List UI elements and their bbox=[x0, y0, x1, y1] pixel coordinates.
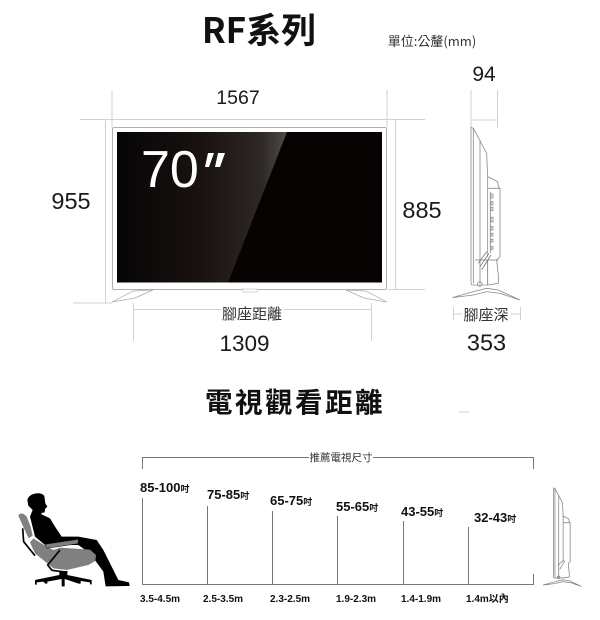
television screen bbox=[117, 132, 382, 282]
panel height value: 885 bbox=[402, 197, 442, 223]
inch mark bbox=[205, 153, 225, 167]
icon: seated person in lounge chair bbox=[18, 493, 130, 586]
foot depth label: 腳座深 bbox=[463, 304, 509, 325]
distance labels: 2.3-2.5m bbox=[270, 594, 310, 605]
size labels bbox=[140, 480, 516, 525]
screen gloss reflection bbox=[117, 132, 287, 282]
size labels: 65-75吋 bbox=[270, 493, 312, 508]
foot distance value: 1309 bbox=[219, 331, 270, 356]
left foot bbox=[112, 290, 153, 302]
armrest bbox=[45, 539, 78, 548]
recommended size bracket bbox=[142, 458, 534, 469]
size labels: 85-100吋 bbox=[140, 480, 190, 495]
title: RF series: RF系列 bbox=[202, 3, 316, 54]
width value: 1567 bbox=[216, 87, 260, 109]
size labels: 55-65吋 bbox=[336, 499, 378, 514]
side view dimension lines bbox=[454, 90, 521, 320]
distance labels: 1.4-1.9m bbox=[401, 594, 441, 605]
bottom bezel button bbox=[243, 289, 257, 292]
television frame bbox=[112, 128, 386, 290]
distance labels: 1.4m以內 bbox=[466, 593, 509, 605]
size label 70 inch: 70 bbox=[141, 141, 199, 199]
distance labels: 1.9-2.3m bbox=[336, 594, 376, 605]
heading: viewing distance: 電視觀看距離 bbox=[205, 380, 385, 420]
foot distance label: 腳座距離 bbox=[222, 303, 282, 324]
chart axes bbox=[142, 498, 534, 584]
chair base bbox=[35, 571, 92, 586]
chair frame bbox=[23, 528, 67, 572]
front view television bbox=[112, 128, 387, 302]
distance labels: 3.5-4.5m bbox=[140, 594, 180, 605]
unit note: 單位:公釐(mm) bbox=[388, 31, 476, 50]
depth value bottom: 353 bbox=[467, 330, 506, 356]
front view dimension lines bbox=[73, 90, 425, 341]
size labels: 32-43吋 bbox=[474, 510, 516, 525]
side view television bbox=[452, 127, 520, 300]
distance labels bbox=[140, 593, 509, 605]
bracket label: 推薦電視尺寸 bbox=[310, 450, 372, 465]
size labels: 75-85吋 bbox=[207, 487, 249, 502]
person silhouette bbox=[27, 493, 130, 586]
right foot bbox=[346, 290, 387, 302]
size labels: 43-55吋 bbox=[401, 504, 443, 519]
distance labels: 2.5-3.5m bbox=[203, 594, 243, 605]
viewing distance chart bbox=[140, 480, 534, 605]
depth value top: 94 bbox=[472, 63, 496, 86]
icon: small television side view bbox=[543, 488, 582, 586]
chair seat bbox=[30, 538, 96, 570]
overall height value: 955 bbox=[51, 188, 91, 214]
chair backrest bbox=[18, 514, 33, 538]
